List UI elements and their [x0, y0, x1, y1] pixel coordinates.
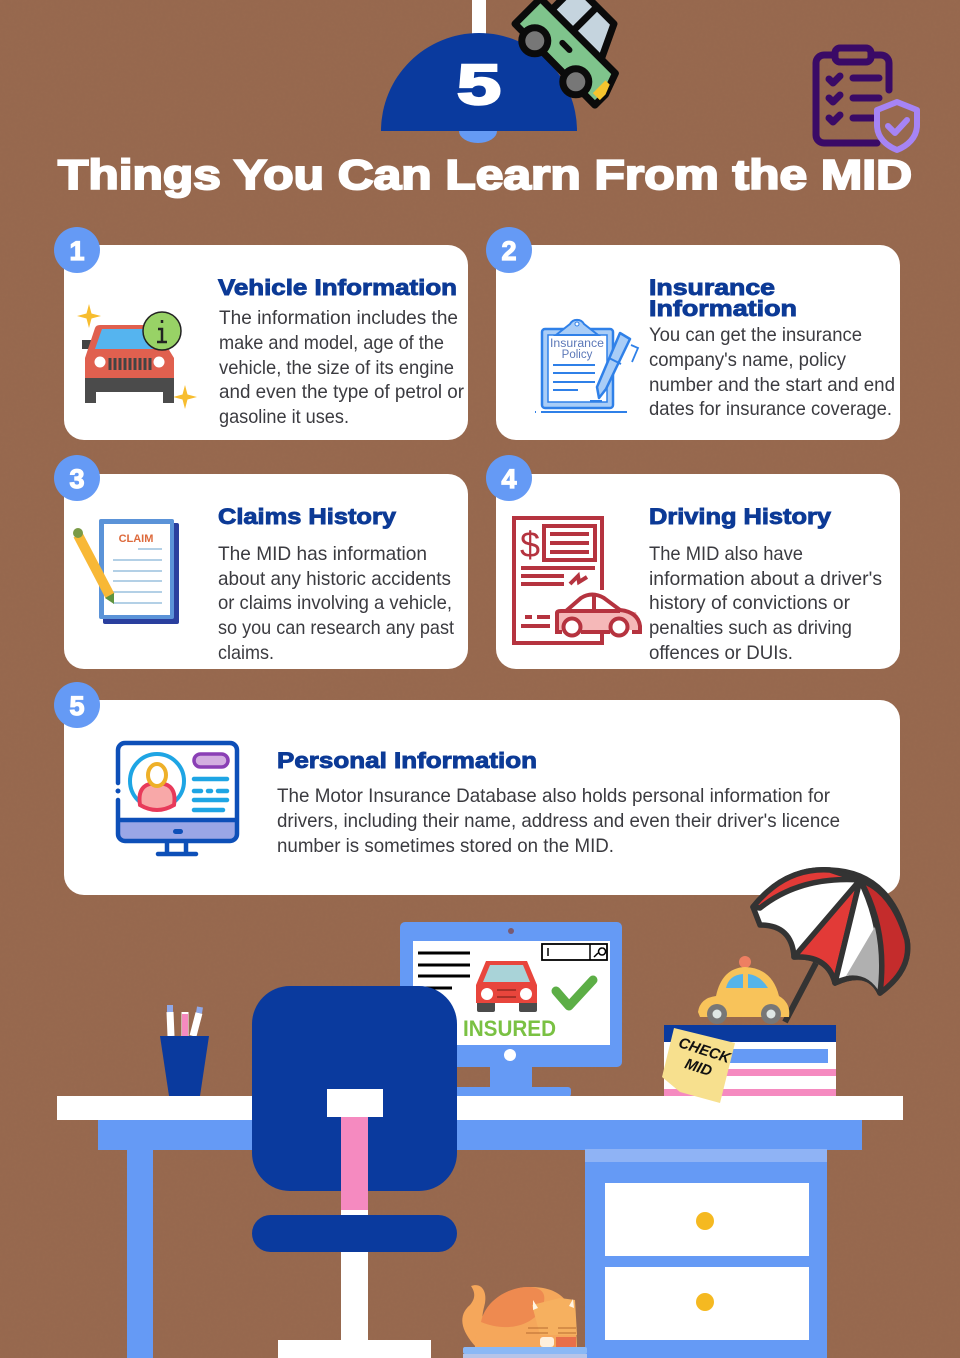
icon: insurance policy clipboard: Insurance [550, 338, 604, 350]
title: Things You Can Learn From the MID [58, 151, 912, 198]
office chair [252, 986, 457, 1358]
icon: monitor with profile [116, 743, 237, 854]
body text: information about a driver's [649, 568, 882, 590]
desk [57, 1096, 903, 1358]
icon: insurance policy clipboard [535, 320, 638, 412]
body text: about any historic accidents [218, 568, 451, 590]
badge 5: 5 [69, 691, 85, 721]
panel: personal information [54, 682, 900, 895]
panel: driving history [486, 455, 900, 669]
icon: red jeep [77, 304, 197, 409]
badge 5 [54, 682, 100, 728]
body text: number is sometimes stored on the MID. [277, 835, 614, 857]
lamp number 5: 5 [457, 53, 501, 117]
panel: vehicle information [54, 227, 468, 440]
icon: claim form and pencil [73, 519, 179, 624]
body text: and even the type of petrol or [219, 381, 464, 403]
body text [277, 785, 840, 857]
badge 4 [486, 455, 532, 501]
icon: clipboard with shield [816, 48, 917, 150]
drawer unit [585, 1149, 827, 1358]
icon: green car [507, 0, 645, 112]
insured label: INSURED [463, 1016, 556, 1041]
badge 1 [54, 227, 100, 273]
body text [219, 307, 464, 428]
sticky note: CHECK [676, 1034, 733, 1067]
heading: Insurance [649, 275, 775, 300]
heading: Driving History [649, 504, 832, 529]
body text: You can get the insurance [649, 324, 862, 346]
body text [649, 543, 882, 664]
icon: document with car: $ [520, 524, 540, 565]
cat bed [463, 1347, 587, 1358]
lamp [381, 0, 577, 143]
icon: claim form and pencil: CLAIM [119, 533, 153, 545]
body text: The MID also have [649, 543, 803, 565]
body text: or claims involving a vehicle, [218, 592, 452, 614]
heading: Personal Information [277, 748, 537, 773]
badge 3 [54, 455, 100, 501]
body text: company's name, policy [649, 349, 846, 371]
body text: offences or DUIs. [649, 642, 793, 664]
body text: vehicle, the size of its engine [219, 357, 454, 379]
body text: penalties such as driving [649, 617, 852, 639]
pen cup [160, 1005, 209, 1096]
badge 3: 3 [69, 464, 85, 494]
heading: Vehicle Information [218, 275, 457, 300]
icon: document with car [514, 518, 640, 643]
umbrella [753, 870, 908, 1022]
toy car [698, 956, 789, 1024]
body text: claims. [218, 642, 274, 664]
heading: Claims History [218, 504, 397, 529]
computer monitor [400, 922, 622, 1097]
panel: claims history [54, 455, 468, 669]
body text [218, 543, 455, 664]
body text: The Motor Insurance Database also holds personal information for [277, 785, 830, 807]
sleeping cat [462, 1285, 577, 1347]
panel: insurance information [486, 227, 900, 440]
icon: insurance policy clipboard: Policy [562, 349, 593, 361]
badge 2: 2 [501, 236, 517, 266]
badge 1: 1 [69, 236, 85, 266]
body text: history of convictions or [649, 592, 850, 614]
body text [649, 324, 895, 420]
body text: make and model, age of the [219, 332, 444, 354]
body text: gasoline it uses. [219, 406, 349, 428]
heading: Information [649, 296, 797, 321]
body text: dates for insurance coverage. [649, 398, 892, 420]
body text: so you can research any past [218, 617, 455, 639]
body text: drivers, including their name, address and even their driver's licence [277, 810, 840, 832]
sticky note [662, 1028, 735, 1103]
icon: green check [556, 980, 593, 1006]
icon: red car on screen [476, 961, 537, 1012]
book stack [664, 1025, 836, 1096]
heading [649, 275, 797, 321]
badge 2 [486, 227, 532, 273]
body text: The MID has information [218, 543, 427, 565]
badge 4: 4 [501, 464, 517, 494]
body text: number and the start and end [649, 374, 895, 396]
body text: The information includes the [219, 307, 458, 329]
sticky note: MID [683, 1055, 714, 1080]
